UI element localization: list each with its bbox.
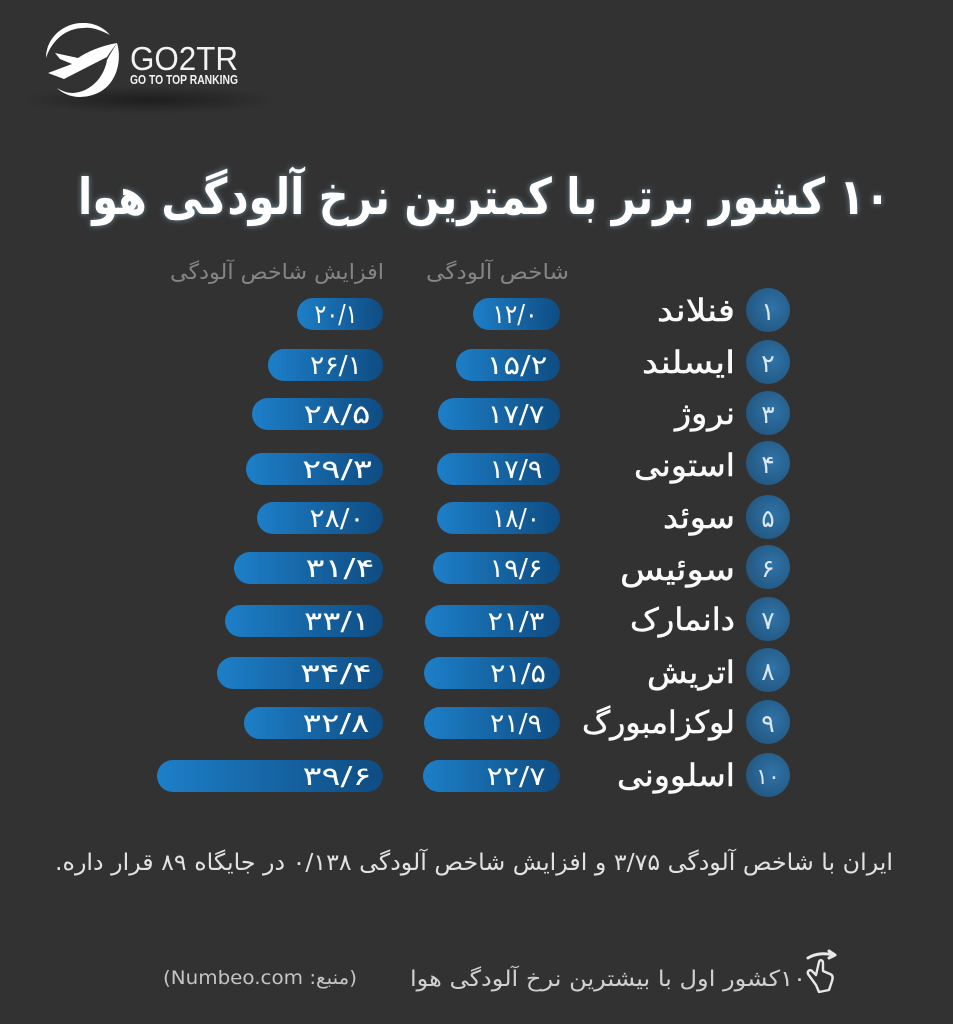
row 9: Luxembourg: لوکزامبورگ: [582, 704, 735, 741]
row 4: Estonia: ۱۷/۹: [490, 455, 542, 485]
row 4: Estonia: ۴: [761, 450, 775, 479]
row 4: Estonia: [246, 441, 790, 485]
row 6: Switzerland: [234, 545, 790, 589]
row 1: Finland: فنلاند: [657, 293, 735, 329]
column heading: pollution increase index: افزایش شاخص آلودگی: [170, 259, 384, 284]
row 1: Finland: ۱۲/۰: [492, 300, 538, 330]
row 3: Norway: [252, 391, 790, 435]
row 8: Austria: [217, 648, 790, 692]
row 5: Sweden: [257, 495, 790, 539]
row 1: Finland: ۱: [761, 297, 775, 326]
row 9: Luxembourg: ۹: [761, 709, 775, 738]
row 8: Austria: ۸: [761, 657, 775, 686]
row 6: Switzerland: سوئیس: [620, 552, 735, 588]
row 5: Sweden: ۵: [761, 504, 775, 533]
row 10: Slovenia: ۳۹/۶: [302, 762, 372, 792]
logo: GO2TR: GO TO TOP RANKING: [130, 72, 238, 87]
logo: GO2TR: GO2TR: [130, 40, 238, 77]
row 3: Norway: نروژ: [673, 396, 735, 432]
row 1: Finland: ۲۰/۱: [314, 300, 358, 330]
row 3: Norway: ۳: [761, 400, 775, 429]
icon: swipe hand: [808, 951, 835, 992]
row 10: Slovenia: ۱۰: [756, 765, 780, 790]
row 6: Switzerland: ۶: [761, 554, 775, 583]
row 10: Slovenia: اسلوونی: [617, 758, 735, 794]
row 7: Denmark: ۷: [761, 606, 775, 635]
row 10: Slovenia: [157, 753, 790, 797]
row 10: Slovenia: ۲۲/۷: [486, 762, 546, 792]
row 2: Iceland: ایسلند: [642, 345, 735, 381]
row 3: Norway: ۲۸/۵: [304, 400, 370, 430]
note about Iran: ایران با شاخص آلودگی ۳/۷۵ و افزایش شاخص آلودگی ۰/۱۳۸ در جایگاه ۸۹ قرار داره.: [55, 848, 893, 876]
row 7: Denmark: دانمارک: [630, 602, 735, 638]
row 6: Switzerland: ۱۹/۶: [490, 554, 542, 584]
row 2: Iceland: ۱۵/۲: [486, 351, 548, 381]
link text: top 10 most polluted: ۱۰کشور اول با بیشترین نرخ آلودگی هوا: [410, 965, 806, 992]
row 2: Iceland: [268, 340, 790, 384]
row 7: Denmark: ۲۱/۳: [488, 607, 545, 637]
row 5: Sweden: سوئد: [663, 500, 735, 536]
row 5: Sweden: ۱۸/۰: [492, 504, 540, 534]
row 8: Austria: اتریش: [647, 655, 735, 691]
row 6: Switzerland: ۳۱/۴: [306, 554, 374, 584]
row 3: Norway: ۱۷/۷: [488, 400, 545, 430]
row 2: Iceland: ۲: [761, 349, 775, 378]
source: (منبع: Numbeo.com): [163, 967, 357, 989]
row 5: Sweden: ۲۸/۰: [310, 504, 364, 534]
row 2: Iceland: ۲۶/۱: [310, 351, 362, 381]
row 9: Luxembourg: [244, 700, 790, 744]
row 8: Austria: ۲۱/۵: [490, 659, 546, 689]
row 4: Estonia: استونی: [634, 448, 735, 484]
row 9: Luxembourg: ۲۱/۹: [490, 709, 542, 739]
row 1: Finland: [297, 288, 790, 332]
row 8: Austria: ۳۴/۴: [300, 659, 372, 689]
logo: GO2TR: [20, 23, 280, 114]
row 9: Luxembourg: ۳۲/۸: [302, 709, 370, 739]
row 7: Denmark: [225, 597, 790, 641]
row 7: Denmark: ۳۳/۱: [304, 607, 370, 637]
row 4: Estonia: ۲۹/۳: [302, 455, 372, 485]
column heading: pollution index: شاخص آلودگی: [426, 259, 569, 284]
